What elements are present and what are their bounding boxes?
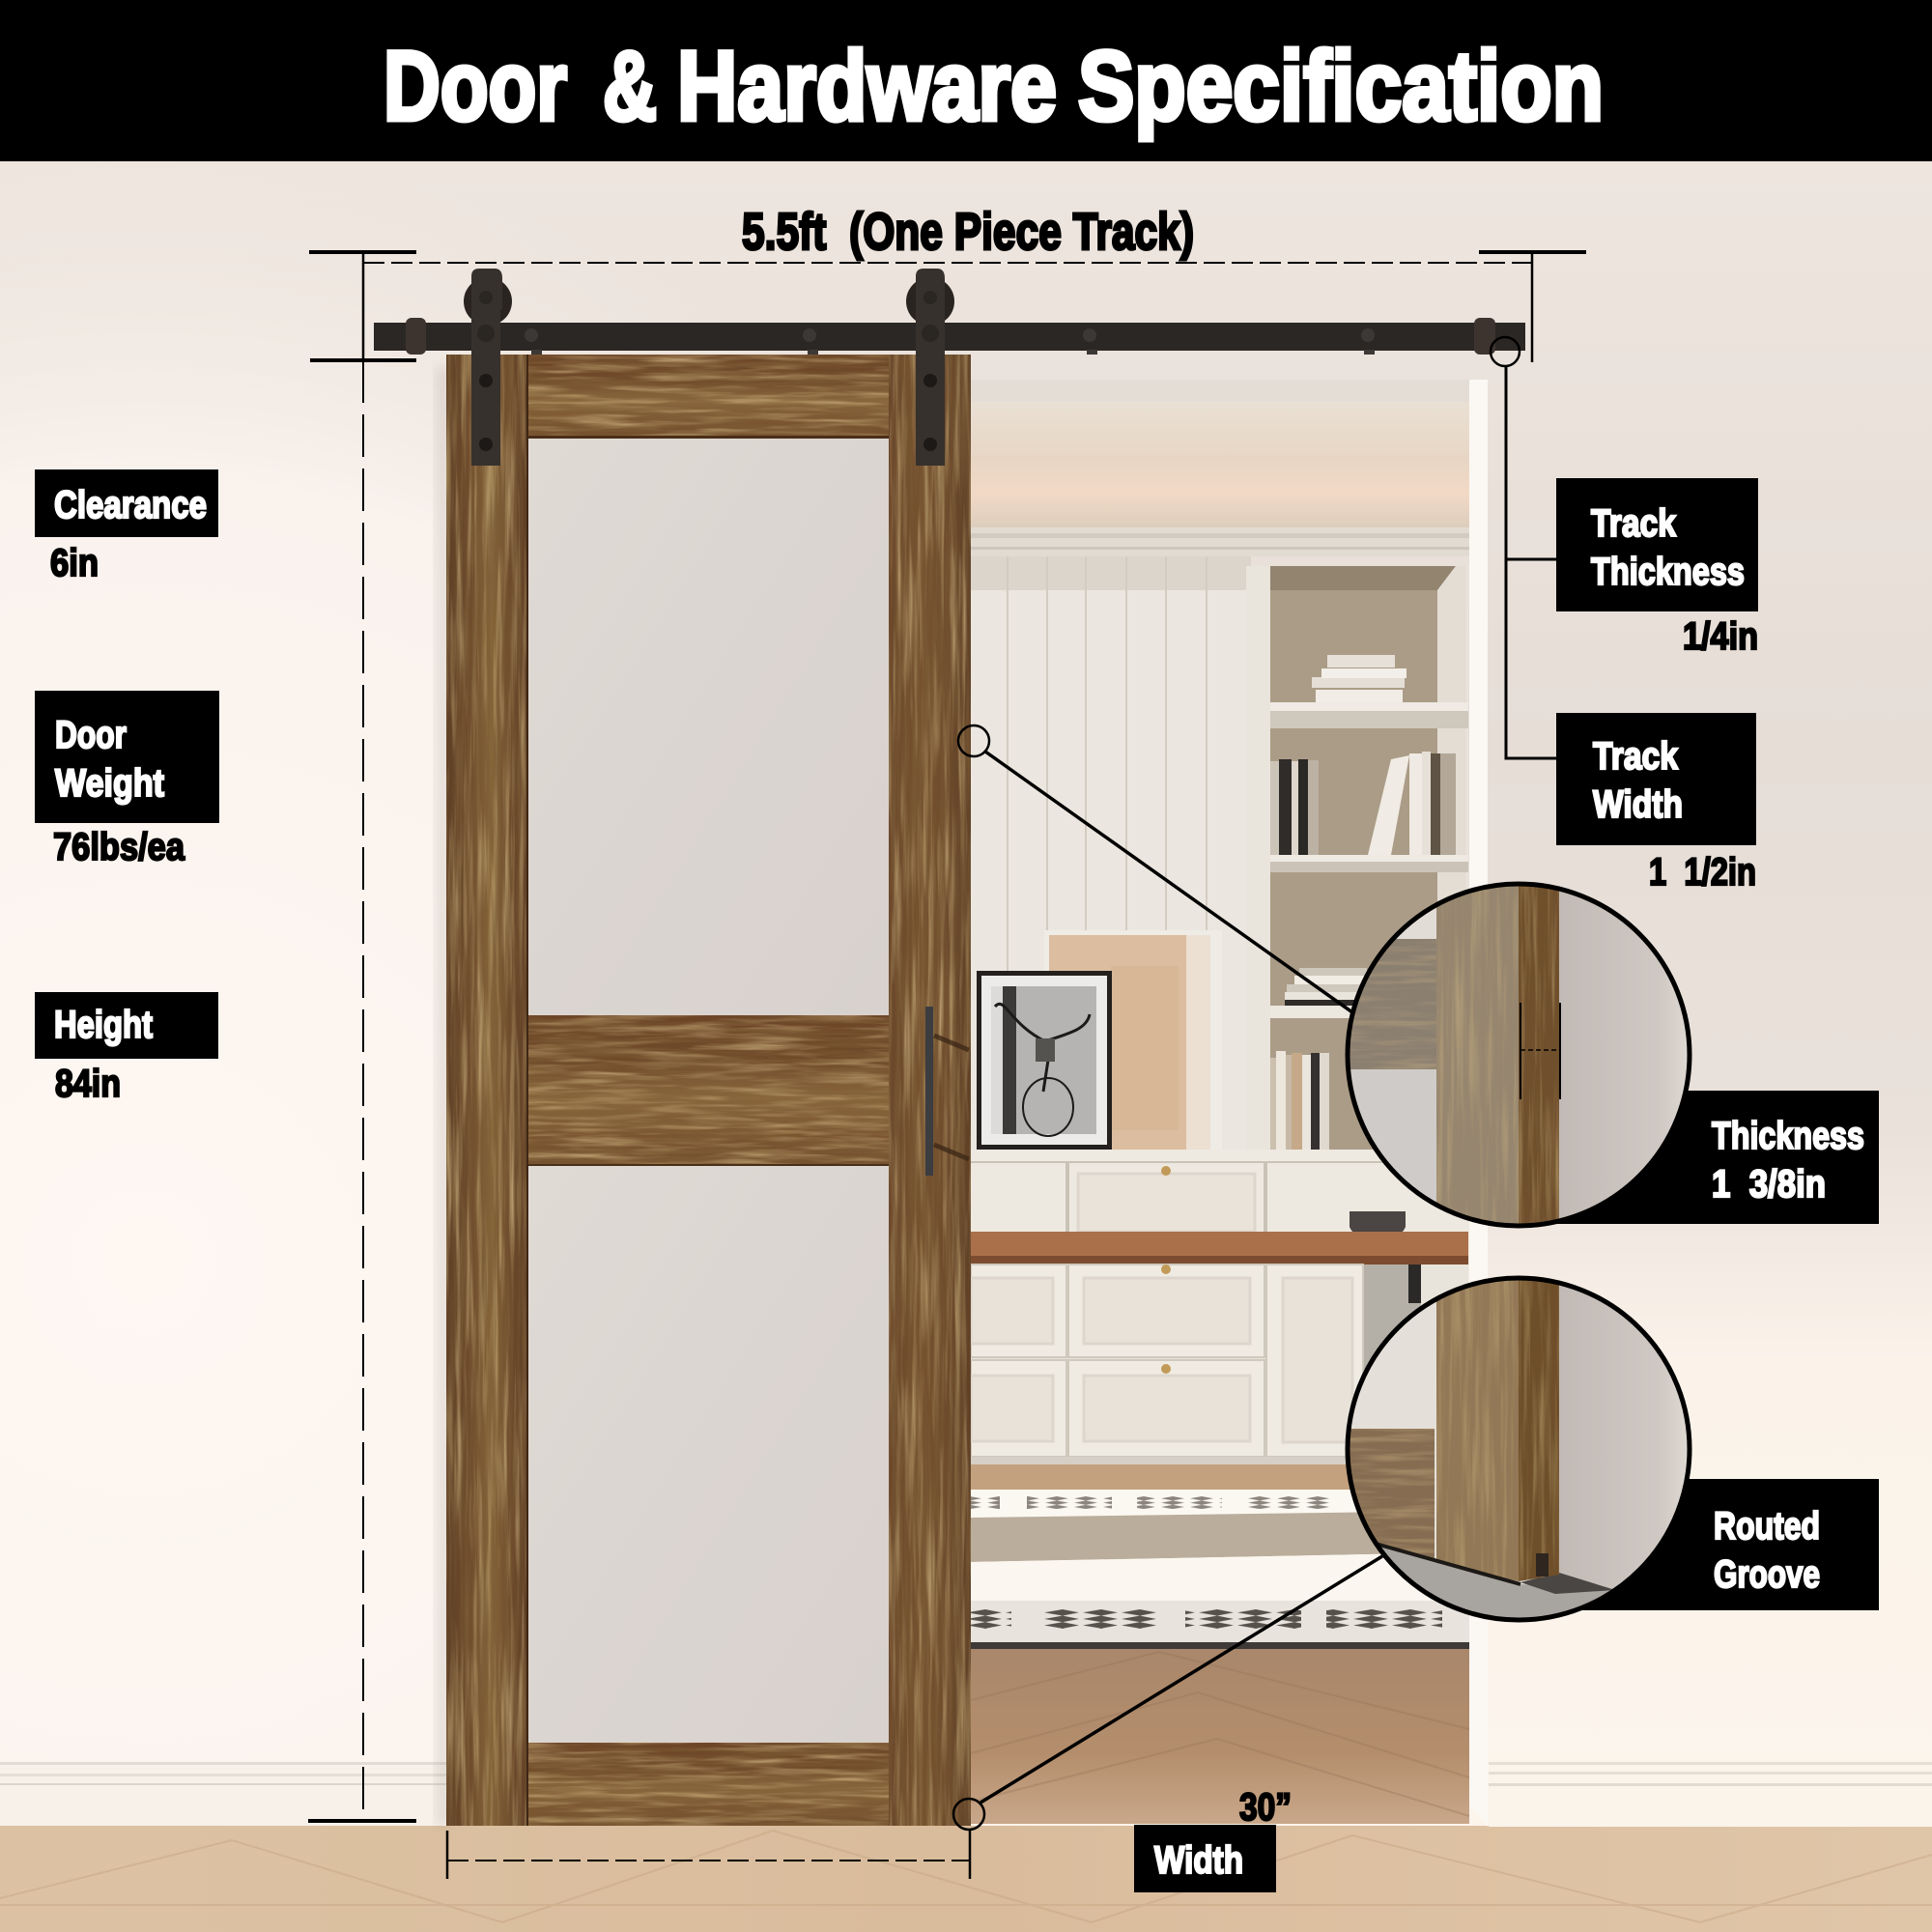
heading bar (0, 0, 1932, 161)
door casing lintel (971, 380, 1485, 402)
large abstract art print (1044, 930, 1222, 1150)
books bottom shelf (1270, 1051, 1329, 1150)
right stopper (1474, 318, 1495, 355)
left stile (446, 355, 528, 1826)
door weight spec: Door (55, 714, 127, 756)
track width spec: Width (1593, 783, 1683, 826)
books third shelf (1285, 968, 1367, 1006)
track thickness spec: 1/4in (1683, 615, 1758, 658)
thickness spec box (1546, 1091, 1879, 1224)
door weight spec: Weight (55, 762, 164, 805)
height spec: Height (54, 1004, 153, 1046)
door thickness detail circle (1343, 879, 1695, 1234)
door shadow on wall (435, 367, 454, 1826)
track width spec: Track (1593, 735, 1679, 778)
clearance spec (35, 469, 218, 584)
upper glass panel (528, 439, 889, 1015)
cornice (971, 527, 1469, 556)
left hanger (464, 269, 512, 466)
width spec (1134, 1786, 1292, 1892)
track length label: 5.5ft (One Piece Track) (742, 203, 1194, 261)
width spec: 30” (1239, 1786, 1292, 1829)
track thickness spec: Track (1591, 502, 1677, 545)
door height dimension line (308, 360, 416, 1821)
height spec: 84in (55, 1063, 121, 1105)
books top shelf (1312, 655, 1406, 702)
title: Door (384, 31, 567, 141)
patterned rug (971, 1490, 1469, 1649)
routed groove detail circle (1343, 1275, 1700, 1633)
coffee bowl on desk (1350, 1211, 1406, 1239)
lower cabinets (971, 1264, 1469, 1464)
title: & (603, 31, 657, 141)
height spec (35, 992, 218, 1105)
clearance spec: Clearance (54, 484, 207, 526)
width spec: Width (1154, 1839, 1243, 1882)
track width spec: 1 1/2in (1649, 851, 1756, 894)
track thickness spec: Thickness (1591, 551, 1745, 593)
room floor (971, 1464, 1469, 1824)
bookcase (1246, 566, 1468, 1165)
groove leader line (953, 1556, 1382, 1830)
routed groove spec box (1546, 1479, 1879, 1610)
door handle (925, 1007, 969, 1176)
track width spec (1556, 713, 1756, 894)
top rail (528, 355, 889, 439)
door weight spec: 76lbs/ea (53, 826, 185, 868)
routed groove spec box: Routed (1714, 1505, 1820, 1548)
thickness leader line (958, 725, 1352, 1012)
title: Hardware (677, 31, 1057, 141)
door width dimension line (447, 1831, 970, 1879)
wood desk (971, 1232, 1468, 1264)
books second shelf (1270, 752, 1456, 855)
doorway room scene (971, 380, 1488, 1827)
lower glass panel (528, 1166, 889, 1743)
thickness spec box: 1 3/8in (1712, 1163, 1826, 1206)
baseboard right (1489, 1760, 1932, 1827)
sliding track hardware (374, 269, 1525, 466)
title (384, 31, 1604, 141)
left stopper (406, 318, 426, 355)
middle rail (528, 1015, 889, 1166)
baseboard left (0, 1762, 446, 1826)
cabinet counter (971, 1150, 1468, 1162)
framed bicycle photo (977, 971, 1112, 1150)
panelled wall (971, 556, 1251, 1155)
right door jamb (1469, 380, 1488, 1827)
thickness spec box: Thickness (1712, 1115, 1864, 1157)
track callout connector (1491, 337, 1556, 758)
title: Specification (1078, 31, 1604, 141)
bottom rail (528, 1743, 889, 1826)
track bolts (525, 328, 1375, 355)
track thickness spec (1556, 478, 1758, 658)
routed groove spec box: Groove (1714, 1553, 1820, 1596)
door weight spec (35, 691, 219, 868)
track bar (374, 323, 1525, 351)
upper cabinets (971, 1162, 1468, 1232)
right hanger (906, 269, 954, 466)
room ceiling and upper wall (971, 402, 1469, 529)
track length dimension lines (309, 252, 1586, 362)
foreground wood floor (0, 1826, 1932, 1932)
right stile (889, 355, 971, 1826)
barn door (435, 355, 971, 1826)
clearance spec: 6in (50, 542, 99, 584)
